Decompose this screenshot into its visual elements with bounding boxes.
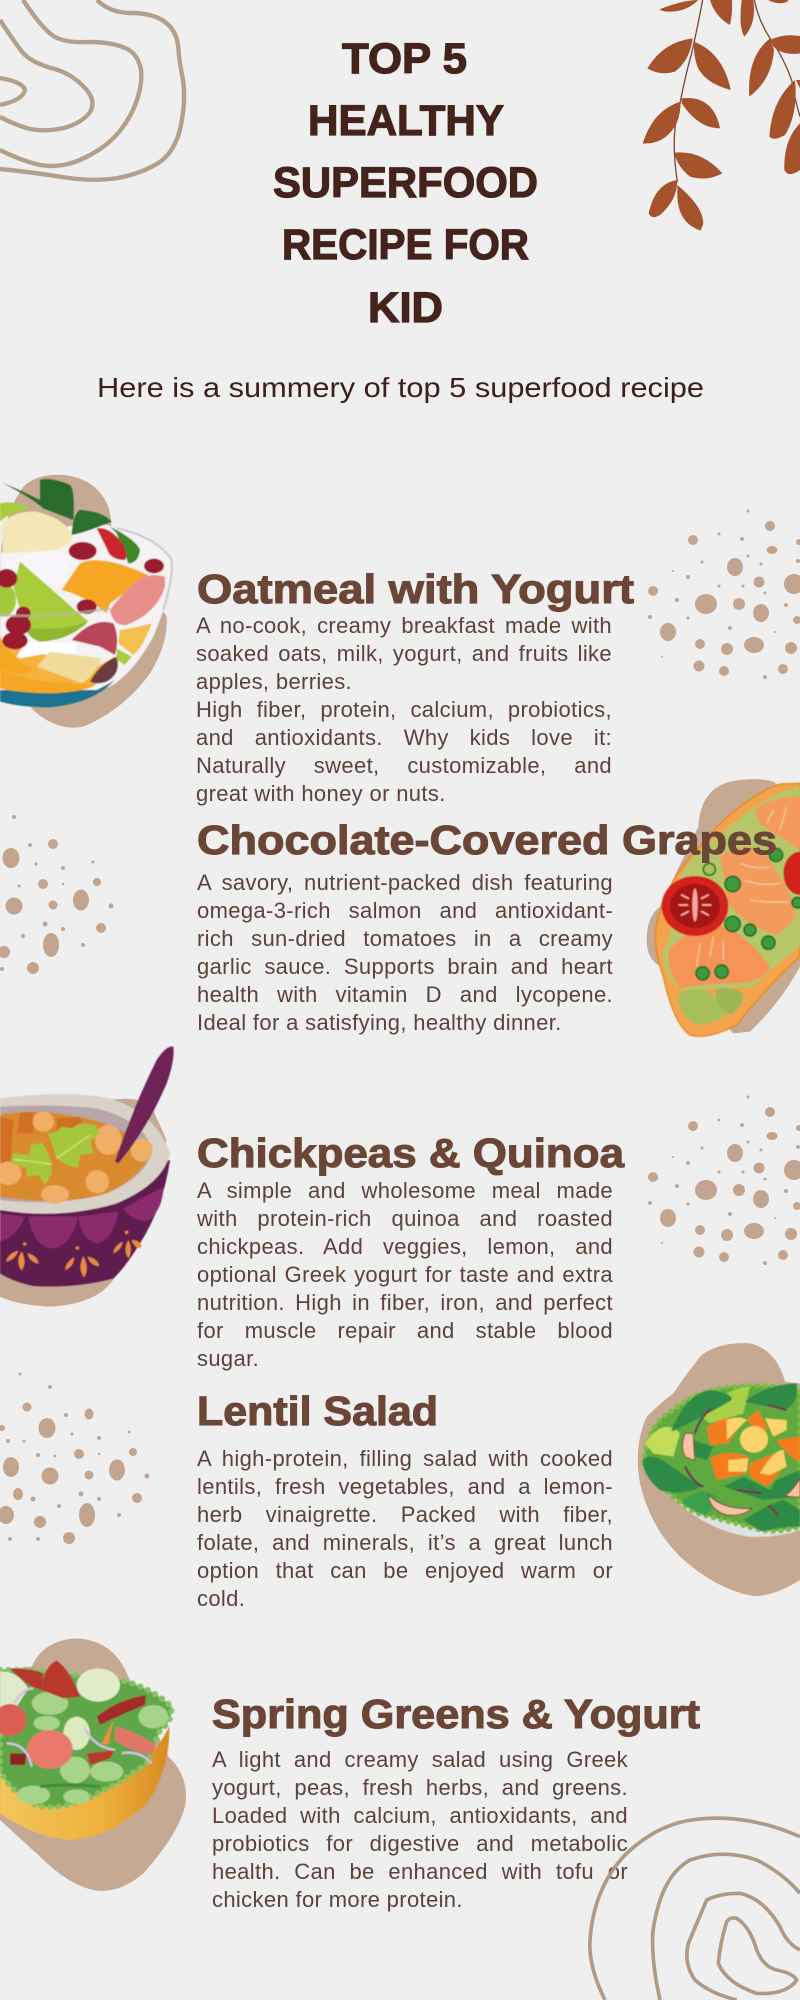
panel: oatmeal with yogurt xyxy=(196,566,634,806)
text block: lentil description: cold. xyxy=(197,1586,245,1611)
text block: grapes description: health with vitamin D and lycopene. xyxy=(197,982,613,1007)
title: RECIPE FOR xyxy=(282,221,529,269)
subtitle: Here is a summery of top 5 superfood recipe xyxy=(97,372,704,403)
text block: chickpeas description: chickpeas. Add veggies, lemon, and xyxy=(197,1234,613,1259)
decorative contour lines: top left xyxy=(0,0,186,182)
text block: oatmeal description: great with honey or nuts. xyxy=(196,781,446,806)
text block: oatmeal description xyxy=(196,613,612,806)
text block: spring greens description: health. Can be enhanced with tofu or xyxy=(212,1859,628,1884)
text block: spring greens description: probiotics for digestive and metabolic xyxy=(212,1831,628,1856)
text block: chickpeas description: with protein-rich quinoa and roasted xyxy=(197,1206,613,1231)
illustration: salmon toast xyxy=(646,779,800,1038)
title: KID xyxy=(368,284,443,332)
text block: chickpeas description xyxy=(197,1178,613,1371)
text block: lentil description: lentils, fresh vegetables, and a lemon- xyxy=(197,1474,613,1499)
panel: lentil salad xyxy=(197,1388,613,1611)
text block: lentil description: A high-protein, filling salad with cooked xyxy=(197,1446,613,1471)
text block: oatmeal description: Naturally sweet, customizable, and xyxy=(196,753,612,778)
illustration: soup bowl with spoon xyxy=(0,1046,174,1307)
decorative contour lines: bottom right xyxy=(588,1816,800,2000)
heading: lentil salad: Lentil Salad xyxy=(197,1388,438,1434)
text block: chickpeas description: for muscle repair and stable blood xyxy=(197,1318,613,1343)
text block: lentil description: folate, and minerals, it’s a great lunch xyxy=(197,1530,613,1555)
title: HEALTHY xyxy=(308,97,504,145)
text block: grapes description: garlic sauce. Supports brain and heart xyxy=(197,954,613,979)
text block: grapes description: omega-3-rich salmon and antioxidant- xyxy=(197,898,613,923)
text block: oatmeal description: apples, berries. xyxy=(196,669,352,694)
text block: grapes description: A savory, nutrient-packed dish featuring xyxy=(197,870,613,895)
text block: grapes description: Ideal for a satisfying, healthy dinner. xyxy=(197,1010,562,1035)
text block: chickpeas description: optional Greek yogurt for taste and extra xyxy=(197,1262,613,1287)
text block: lentil description: option that can be enjoyed warm or xyxy=(197,1558,613,1583)
text block: spring greens description xyxy=(212,1747,628,1912)
illustration: mixed green salad plate xyxy=(638,1343,800,1596)
text block: grapes description xyxy=(197,870,613,1035)
icon: hanging leaves top right xyxy=(642,0,800,231)
heading: chocolate-covered grapes: Chocolate-Covered Grapes xyxy=(197,817,777,863)
illustration: fruit and yogurt bowl xyxy=(0,474,174,728)
panel: chickpeas and quinoa xyxy=(197,1130,625,1371)
text block: oatmeal description: High fiber, protein, calcium, probiotics, xyxy=(196,697,612,722)
title: TOP 5 xyxy=(342,35,467,83)
text block: spring greens description: chicken for more protein. xyxy=(212,1887,463,1912)
text block: lentil description: herb vinaigrette. Packed with fiber, xyxy=(197,1502,613,1527)
text block: spring greens description: A light and creamy salad using Greek xyxy=(212,1747,628,1772)
heading: oatmeal with yogurt: Oatmeal with Yogurt xyxy=(197,566,634,612)
text block: chickpeas description: sugar. xyxy=(197,1346,259,1371)
text block: chickpeas description: nutrition. High in fiber, iron, and perfect xyxy=(197,1290,613,1315)
panel: spring greens and yogurt xyxy=(212,1691,700,1912)
title xyxy=(273,35,538,332)
text block: spring greens description: Loaded with calcium, antioxidants, and xyxy=(212,1803,628,1828)
text block: spring greens description: yogurt, peas, fresh herbs, and greens. xyxy=(212,1775,628,1800)
heading: spring greens and yogurt: Spring Greens & Yogurt xyxy=(212,1691,700,1737)
heading: chickpeas and quinoa: Chickpeas & Quinoa xyxy=(197,1130,625,1176)
text block: grapes description: rich sun-dried tomatoes in a creamy xyxy=(197,926,613,951)
text block: lentil description xyxy=(197,1446,613,1611)
title: SUPERFOOD xyxy=(273,159,538,207)
text block: oatmeal description: and antioxidants. Why kids love it: xyxy=(196,725,612,750)
panel: chocolate-covered grapes xyxy=(197,817,777,1035)
text block: oatmeal description: A no-cook, creamy breakfast made with xyxy=(196,613,612,638)
text block: oatmeal description: soaked oats, milk, yogurt, and fruits like xyxy=(196,641,612,666)
illustration: garden salad in yellow bowl xyxy=(0,1638,186,1891)
text block: chickpeas description: A simple and wholesome meal made xyxy=(197,1178,613,1203)
